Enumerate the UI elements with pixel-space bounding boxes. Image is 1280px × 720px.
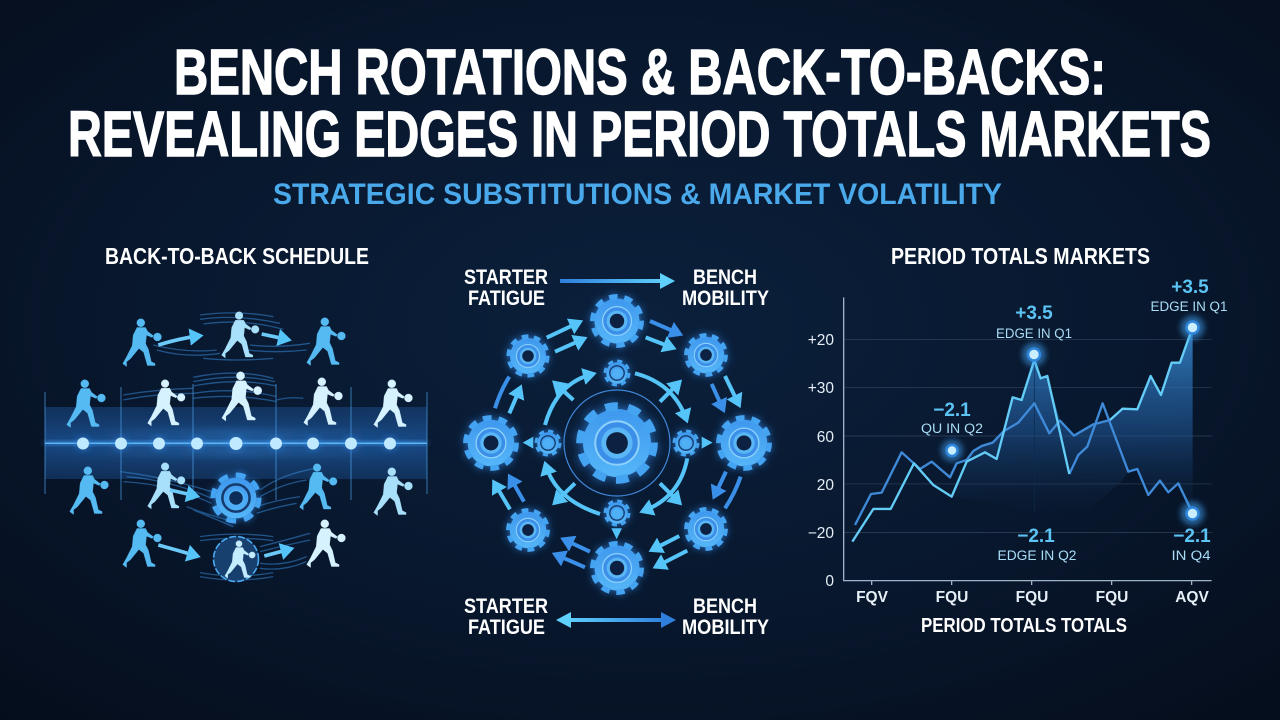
- callout: edge in Q1 right: [1150, 277, 1228, 314]
- x-axis labels: FQU: [936, 589, 968, 606]
- x-axis title: PERIOD TOTALS TOTALS: [921, 615, 1127, 637]
- callout: edge in Q1 centre: +3.5: [1015, 303, 1053, 324]
- y-axis labels: 0: [825, 573, 834, 590]
- motion streaks: [120, 313, 317, 580]
- callout: edge in Q2: −2.1: [1017, 526, 1055, 547]
- y-axis labels: −20: [808, 525, 834, 542]
- label: starter fatigue top: [464, 266, 548, 310]
- callout: QU in Q2: [921, 400, 983, 436]
- panel: back-to-back schedule: [45, 243, 427, 582]
- timeline band: [45, 384, 427, 500]
- subtitle: STRATEGIC SUBSTITUTIONS & MARKET VOLATILITY: [273, 178, 1002, 211]
- y-axis labels: 60: [817, 429, 834, 446]
- x-axis labels: FQU: [1016, 589, 1048, 606]
- callout: edge in Q1 right: +3.5: [1171, 277, 1209, 298]
- arrow: two-way: [556, 612, 676, 628]
- inner small gears: [536, 361, 698, 525]
- label: bench mobility bottom: BENCH: [693, 595, 757, 618]
- gear network: [466, 297, 769, 592]
- y-axis labels: +30: [808, 380, 834, 397]
- central gear: [564, 390, 670, 496]
- callout: in Q4: −2.1: [1173, 526, 1211, 547]
- label: starter fatigue bottom: FATIGUE: [468, 616, 545, 639]
- title: [68, 36, 1211, 170]
- icon: gear on timeline: [213, 475, 259, 521]
- panel: period totals markets: [808, 243, 1228, 637]
- label: starter fatigue bottom: STARTER: [464, 595, 548, 618]
- callout: in Q4: IN Q4: [1172, 548, 1211, 563]
- callout: QU in Q2: −2.1: [933, 400, 971, 421]
- label: bench mobility bottom: MOBILITY: [682, 616, 769, 639]
- heading: back-to-back schedule: BACK-TO-BACK SCHEDULE: [105, 243, 369, 269]
- y-axis labels: +20: [808, 332, 834, 349]
- players: rows: [67, 312, 412, 567]
- markers: [941, 316, 1204, 526]
- x-axis labels: AQV: [1175, 589, 1209, 606]
- arrow: starter to bench: [560, 273, 675, 289]
- callout: edge in Q1 centre: EDGE IN Q1: [996, 326, 1072, 341]
- label: starter fatigue top: STARTER: [464, 266, 548, 289]
- callout: edge in Q1 centre: [996, 303, 1072, 341]
- x-axis labels: [856, 589, 1209, 606]
- callout: QU in Q2: QU IN Q2: [921, 421, 983, 436]
- y-axis labels: [808, 332, 834, 590]
- callout: edge in Q2: EDGE IN Q2: [998, 548, 1076, 563]
- callout: in Q4: [1172, 526, 1211, 563]
- outer gears: [466, 297, 769, 592]
- label: bench mobility top: [682, 266, 769, 310]
- motion arrows: [158, 334, 289, 556]
- y-axis labels: 20: [817, 477, 834, 494]
- label: bench mobility top: BENCH: [693, 266, 757, 289]
- icon: player in circle: [214, 536, 258, 582]
- label: bench mobility bottom: [682, 595, 769, 639]
- callout: edge in Q2: [998, 526, 1076, 563]
- circulating arrows: [495, 321, 741, 567]
- panel: rotation gears: [464, 266, 769, 639]
- x-axis labels: FQU: [1096, 589, 1128, 606]
- x-axis labels: FQV: [856, 589, 889, 606]
- line chart: [844, 297, 1212, 585]
- label: bench mobility top: MOBILITY: [682, 287, 769, 310]
- heading: period totals markets: PERIOD TOTALS MARKETS: [891, 243, 1150, 269]
- label: starter fatigue top: FATIGUE: [468, 287, 545, 310]
- callout: edge in Q1 right: EDGE IN Q1: [1150, 299, 1228, 314]
- label: starter fatigue bottom: [464, 595, 548, 639]
